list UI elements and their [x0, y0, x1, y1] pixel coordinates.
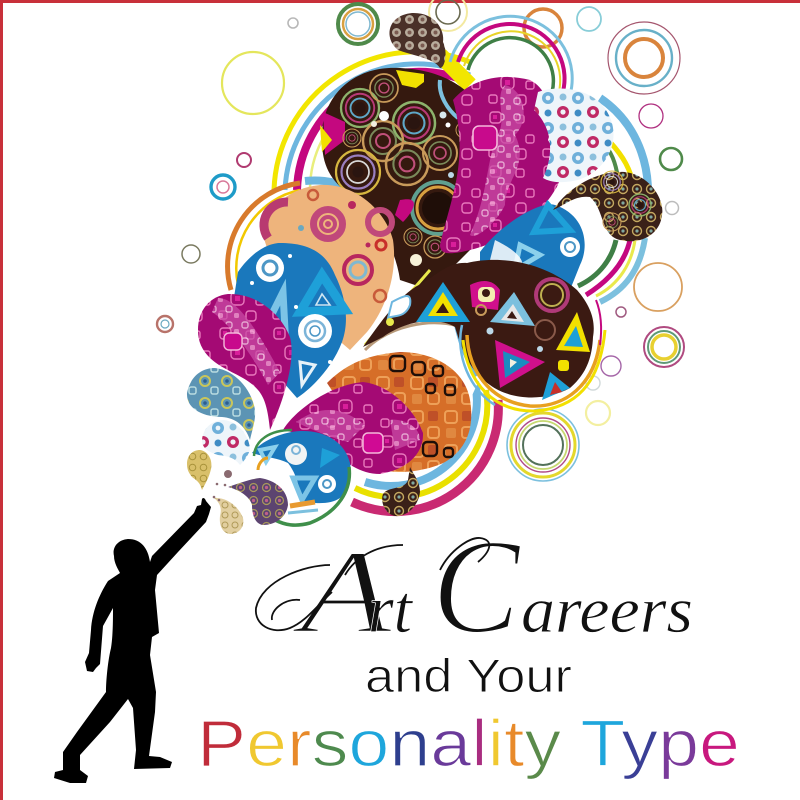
blob: blue top triangle	[480, 204, 585, 290]
scattered specks by the hand	[213, 470, 232, 501]
blob: magenta left paisley	[198, 294, 292, 430]
title: Art Careers: C	[432, 512, 521, 662]
blob: pale gold paisley	[214, 498, 243, 534]
title: Art Careers: areers	[521, 574, 693, 647]
ring around brown triangles	[460, 300, 605, 411]
blob: blue and white circles	[534, 88, 614, 182]
blob: peach circles	[262, 185, 394, 350]
subtitle: Personality Type: Personality Type	[197, 706, 740, 780]
title: Art Careers: A	[291, 525, 393, 658]
blob: small brown drop	[382, 467, 420, 516]
blob: brown circles	[320, 68, 490, 290]
blob: teal paisley	[187, 368, 255, 440]
blob: brown right paisley	[553, 171, 662, 241]
blob: small grey top drop	[390, 13, 446, 68]
rainbow arcs behind the blobs	[228, 16, 648, 512]
blob: gold paisley	[187, 450, 211, 490]
blob: orange squares	[327, 352, 471, 472]
blob: brown triangles	[363, 260, 594, 400]
lower blob green edge	[254, 430, 349, 525]
blob: blue triangles	[232, 243, 346, 398]
blob: purple drop	[228, 478, 288, 525]
title: Art Careers: rt	[368, 571, 414, 647]
loose rings	[157, 0, 684, 481]
figure silhouette reaching up	[54, 498, 211, 783]
blob: magenta lower paisley	[283, 382, 423, 474]
subtitle: and Your: and Your	[365, 649, 572, 702]
title: Art Careers	[256, 512, 693, 662]
blob: white and blue paisley	[202, 420, 250, 465]
blob: blue lower triangles	[252, 431, 351, 503]
blob: magenta squares heart	[440, 77, 560, 253]
white swoosh with rainbow edge	[258, 270, 480, 460]
